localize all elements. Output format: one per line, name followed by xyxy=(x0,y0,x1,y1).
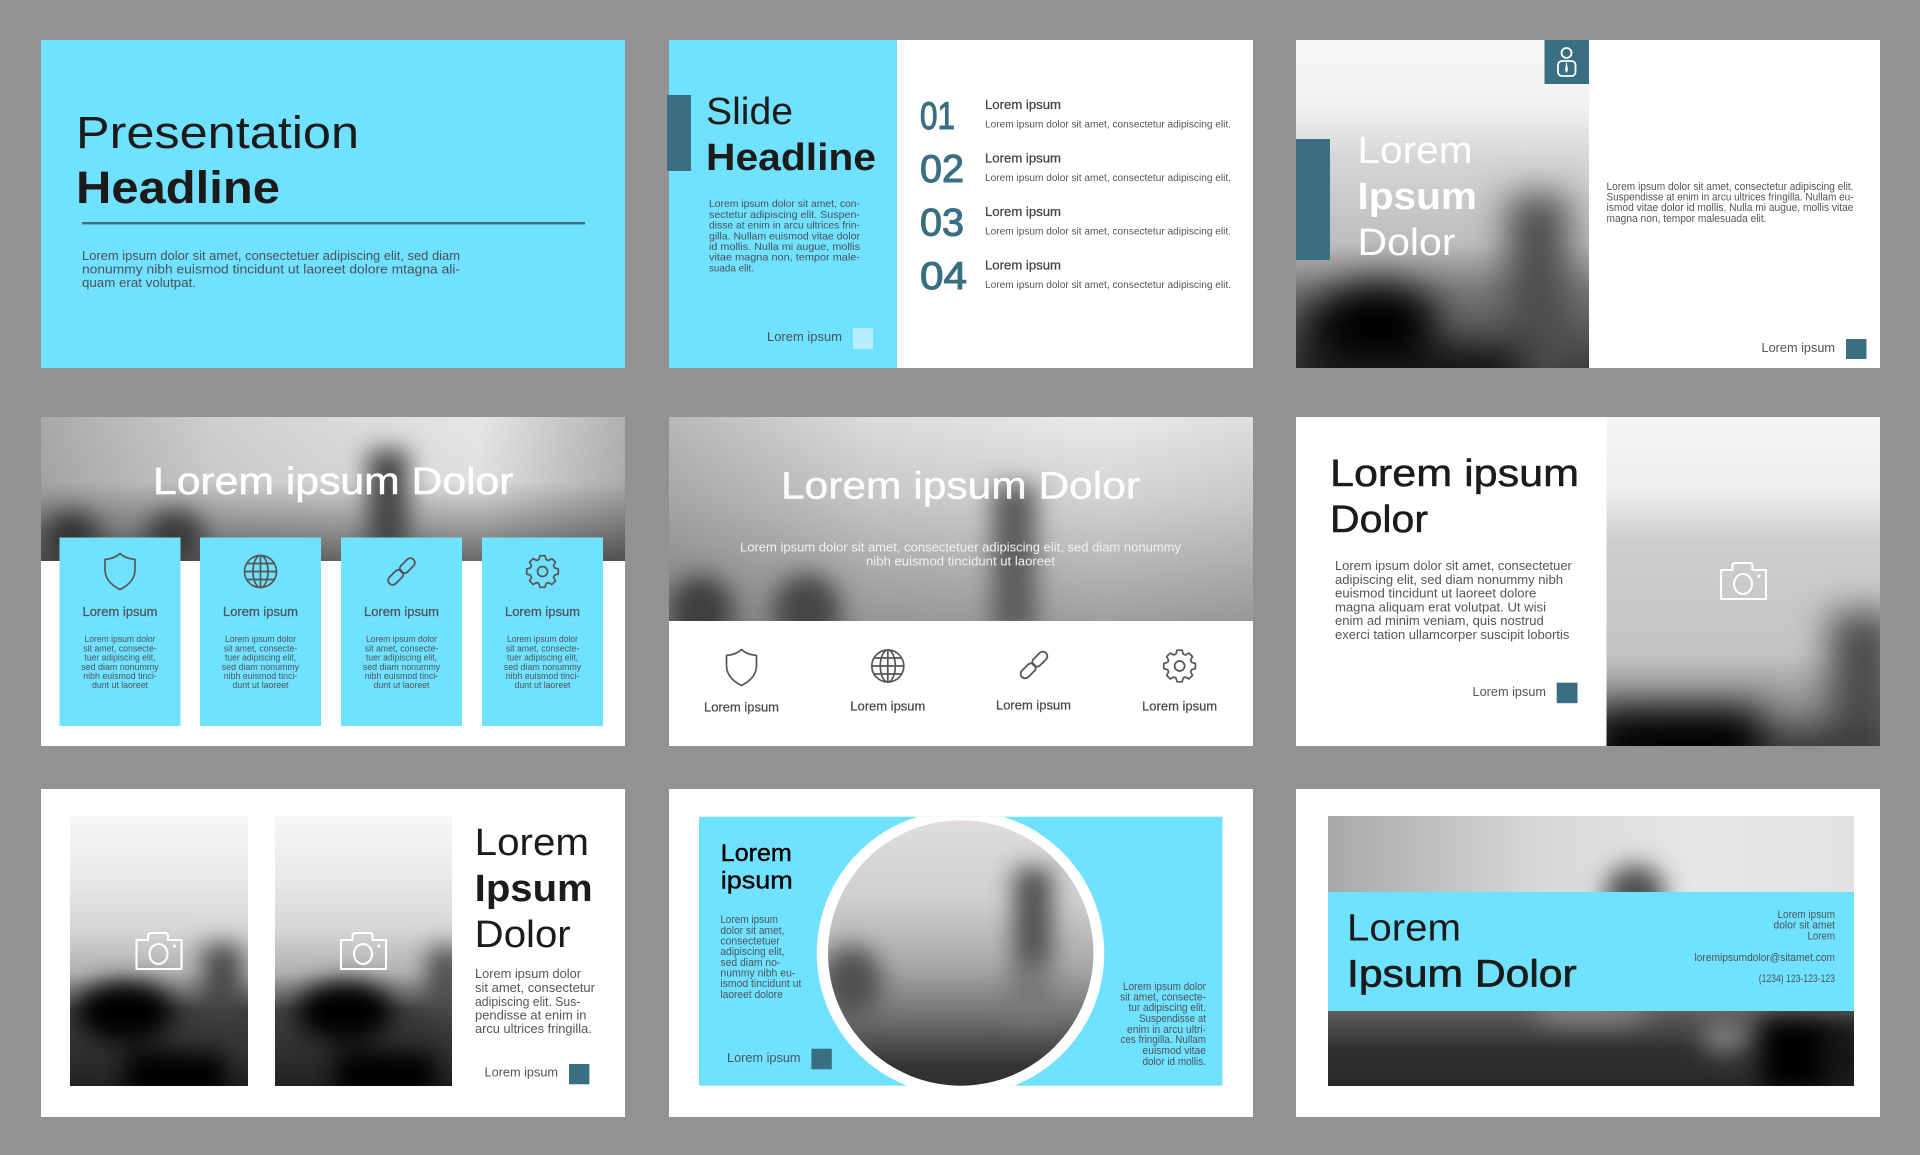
footer label: Lorem ipsum xyxy=(1762,341,1835,355)
list item 02: Lorem ipsum dolor sit amet, consectetur adipiscing elit. xyxy=(985,173,1231,184)
footer label xyxy=(727,1049,832,1069)
blurred photo right xyxy=(275,816,452,1086)
footer label: Lorem ipsum xyxy=(484,1066,558,1080)
card 4: Lorem ipsum dolor xyxy=(507,634,578,644)
heading: ipsum xyxy=(721,867,793,894)
footer label xyxy=(484,1064,589,1084)
footer label xyxy=(1472,683,1578,703)
text block: right: tur adipiscing elit. xyxy=(1128,1002,1206,1014)
list item 01 xyxy=(920,95,1231,138)
text block: description: id mollis. Nulla mi augue, mollis xyxy=(709,242,860,253)
icon item: gear xyxy=(1142,650,1217,714)
blurred photo xyxy=(1606,417,1880,746)
text block: subheading: nibh euismod tincidunt ut laoreet xyxy=(866,554,1055,568)
card 4: nibh euismod tinci- xyxy=(506,671,579,681)
icon: camera left xyxy=(136,933,182,969)
contact details: Lorem ipsum xyxy=(1778,909,1835,921)
list item 02: Lorem ipsum xyxy=(985,152,1061,166)
text block: left xyxy=(720,914,801,1001)
panel: text and photo slide xyxy=(1296,417,1880,746)
footer label xyxy=(767,328,873,349)
text block: description: Lorem ipsum dolor sit amet, consectetur adipiscing elit. xyxy=(1606,181,1854,193)
icon: link xyxy=(386,556,417,587)
heading: Lorem Ipsum Dolor: Lorem xyxy=(1358,130,1472,172)
text block: right: ces fringilla. Nullam xyxy=(1120,1034,1206,1046)
text block: intro xyxy=(82,249,460,290)
panel: icon row slide xyxy=(669,417,1253,746)
text block: left: nummy nibh eu- xyxy=(720,968,796,980)
heading: Lorem xyxy=(721,840,792,867)
heading: Lorem ipsum Dolor xyxy=(153,461,514,503)
text block: description: adipiscing elit, sed diam nonummy nibh xyxy=(1335,572,1563,587)
card 3: tuer adipiscing elit, xyxy=(366,652,437,662)
text block: right: euismod vitae xyxy=(1142,1045,1206,1057)
heading: Ipsum xyxy=(475,868,593,910)
list item 01: 01 xyxy=(920,95,955,138)
card 3: Lorem ipsum xyxy=(364,604,439,619)
icon: person badge xyxy=(1544,40,1589,84)
heading: Presentation Headline: Headline xyxy=(76,162,280,213)
footer label: Lorem ipsum xyxy=(727,1051,800,1065)
blurred photo xyxy=(1296,40,1589,400)
blurred photo left xyxy=(70,816,248,1086)
list item 03: Lorem ipsum dolor sit amet, consectetur adipiscing elit. xyxy=(985,226,1231,238)
text block: description: magna aliquam erat volutpat. Ut wisi xyxy=(1335,600,1546,614)
footer label: Lorem ipsum xyxy=(767,330,842,344)
card 2 xyxy=(200,538,321,726)
list item 04 xyxy=(920,255,1231,298)
heading: Lorem Ipsum Dolor xyxy=(1358,130,1477,264)
heading: Ipsum Dolor xyxy=(1347,954,1577,996)
heading xyxy=(1347,908,1577,996)
text block: description: Lorem ipsum dolor xyxy=(475,966,582,981)
icon item: shield: Lorem ipsum xyxy=(704,700,779,715)
text block: left: dolor sit amet, xyxy=(720,925,784,937)
icon: gear xyxy=(527,556,558,587)
text block: subheading xyxy=(740,540,1181,568)
list item 04: 04 xyxy=(920,255,967,298)
text block: description: sit amet, consectetur xyxy=(475,980,596,995)
text block: description xyxy=(1335,558,1572,642)
accent bar xyxy=(1296,139,1330,260)
card 1: nibh euismod tinci- xyxy=(83,671,157,681)
card 3: dunt ut laoreet xyxy=(374,680,430,690)
card 2: sed diam nonummy xyxy=(222,662,300,672)
contact details: loremipsumdolor@sitamet.com xyxy=(1694,952,1835,964)
text block: description: ismod vitae dolor id mollis. Nulla mi augue, mollis vitae xyxy=(1606,202,1854,214)
heading xyxy=(1330,453,1579,541)
text block: description: vitae magna non, tempor male- xyxy=(709,252,860,264)
heading: Dolor xyxy=(475,914,571,956)
card 3: sed diam nonummy xyxy=(363,662,441,672)
card 1: sed diam nonummy xyxy=(81,662,159,672)
list item 03: 03 xyxy=(920,202,964,244)
icon item: gear: Lorem ipsum xyxy=(1142,699,1217,714)
text block: description: exerci tation ullamcorper suscipit lobortis xyxy=(1335,627,1570,642)
cyan band xyxy=(1328,892,1854,1011)
heading: Lorem Ipsum Dolor: Dolor xyxy=(1358,222,1456,264)
card 4: Lorem ipsum xyxy=(505,604,580,619)
list item 04: Lorem ipsum xyxy=(985,258,1061,272)
text block: right: sit amet, consecte- xyxy=(1120,992,1206,1004)
list item 04: Lorem ipsum dolor sit amet, consectetur adipiscing elit. xyxy=(985,280,1231,291)
text block: description: suada elit. xyxy=(709,264,754,274)
heading: Presentation Headline: Presentation xyxy=(76,107,359,158)
text block: right: enim in arcu ultri- xyxy=(1127,1024,1206,1036)
list item 02: 02 xyxy=(920,148,964,191)
list item 03 xyxy=(920,202,1231,244)
text block: description: sectetur adipiscing elit. Suspen- xyxy=(709,210,860,221)
card 4: dunt ut laoreet xyxy=(514,680,571,690)
contact details: Lorem xyxy=(1808,930,1835,942)
icon item: globe: Lorem ipsum xyxy=(850,699,925,714)
text block: description xyxy=(475,966,596,1036)
text block: subheading: Lorem ipsum dolor sit amet, consectetuer adipiscing elit, sed diam nonummy xyxy=(740,540,1181,554)
panel: circle photo slide xyxy=(669,789,1253,1117)
card 1: Lorem ipsum xyxy=(82,604,158,619)
text block: description: euismod tincidunt ut laoreet dolore xyxy=(1335,586,1536,601)
panel: four cards slide xyxy=(41,417,625,746)
card 3: sit amet, consecte- xyxy=(365,644,438,654)
text block: description: pendisse at enim in xyxy=(475,1008,586,1023)
card 1: tuer adipiscing elit, xyxy=(84,652,156,662)
heading: Dolor xyxy=(1330,499,1428,541)
card 4: tuer adipiscing elit, xyxy=(507,652,578,662)
panel: two photos slide xyxy=(41,789,625,1117)
text block: description: enim ad minim veniam, quis nostrud xyxy=(1335,613,1544,628)
text block: description: Suspendisse at enim in arcu ultrices fringilla. Nullam eu- xyxy=(1606,192,1854,204)
accent bar xyxy=(667,95,691,171)
blurred photo banner xyxy=(669,417,1253,621)
icon item: link: Lorem ipsum xyxy=(996,698,1071,713)
text block: left: sed diam no- xyxy=(720,957,781,969)
panel: presentation headline slide xyxy=(41,40,625,368)
text block: description xyxy=(709,199,861,274)
list item 01: Lorem ipsum xyxy=(985,98,1061,112)
contact details: dolor sit amet xyxy=(1774,920,1835,932)
text block: description: Lorem ipsum dolor sit amet, con- xyxy=(709,199,860,210)
text block: right: dolor id mollis. xyxy=(1142,1056,1206,1068)
card 1: sit amet, consecte- xyxy=(83,644,157,654)
text block: intro: nonummy nibh euismod tincidunt ut laoreet dolore mtagna ali- xyxy=(82,262,460,276)
text block: right: Suspendisse at xyxy=(1139,1013,1206,1025)
list item 01: Lorem ipsum dolor sit amet, consectetur adipiscing elit. xyxy=(985,120,1231,130)
card 1: Lorem ipsum dolor xyxy=(84,634,156,644)
text block: description: adipiscing elit. Sus- xyxy=(475,994,580,1009)
text block: description: arcu ultrices fringilla. xyxy=(475,1021,592,1036)
heading: Lorem ipsum xyxy=(1330,453,1579,495)
heading: Slide Headline: Slide xyxy=(706,91,793,133)
heading: Lorem Ipsum Dolor: Ipsum xyxy=(1358,176,1477,218)
heading: Lorem ipsum Dolor xyxy=(781,466,1140,508)
icon: globe xyxy=(244,556,276,588)
text block: description: gilla. Nullam euismod vitae dolor xyxy=(709,232,861,242)
card 2: sit amet, consecte- xyxy=(224,644,297,654)
card 3 xyxy=(341,538,462,726)
panel: contact band slide xyxy=(1296,789,1880,1117)
white circle frame xyxy=(817,817,1104,1086)
card 1: dunt ut laoreet xyxy=(92,680,148,690)
icon item: link xyxy=(996,650,1071,713)
text block: description: Lorem ipsum dolor sit amet, consectetuer xyxy=(1335,558,1572,573)
heading: Lorem xyxy=(1347,908,1461,950)
card 2: Lorem ipsum dolor xyxy=(225,634,296,644)
icon item: shield xyxy=(704,650,779,715)
heading: Slide Headline xyxy=(706,91,876,179)
heading: Slide Headline: Headline xyxy=(706,137,876,179)
heading: Presentation Headline xyxy=(76,107,359,213)
contact details: (1234) 123-123-123 xyxy=(1759,973,1835,985)
card 4: sit amet, consecte- xyxy=(506,644,579,654)
card 2: nibh euismod tinci- xyxy=(224,671,297,681)
blurred photo banner xyxy=(41,417,625,575)
card 2: Lorem ipsum xyxy=(223,604,298,619)
heading xyxy=(721,840,793,894)
card 2: tuer adipiscing elit, xyxy=(225,652,296,662)
icon item: globe xyxy=(850,650,925,714)
card 2: dunt ut laoreet xyxy=(232,680,289,690)
text block: description xyxy=(1606,181,1854,225)
text block: description: magna non, tempor malesuada elit. xyxy=(1606,213,1766,225)
text block: left: Lorem ipsum xyxy=(720,914,778,926)
text block: left: ismod tincidunt ut xyxy=(720,978,801,990)
blurred photo xyxy=(1328,816,1866,1092)
card 1 xyxy=(60,538,180,726)
card 3: nibh euismod tinci- xyxy=(365,671,438,681)
footer label xyxy=(1762,339,1866,359)
card 3: Lorem ipsum dolor xyxy=(366,634,437,644)
text block: left: adipiscing elit, xyxy=(720,946,784,958)
contact details xyxy=(1694,909,1835,985)
text block: left: laoreet dolore xyxy=(720,989,783,1001)
card 4 xyxy=(482,538,603,726)
card 4: sed diam nonummy xyxy=(504,662,582,672)
text block: right: Lorem ipsum dolor xyxy=(1123,981,1206,993)
icon: camera right xyxy=(341,933,386,969)
text block: right xyxy=(1120,981,1206,1068)
text block: intro: Lorem ipsum dolor sit amet, consectetuer adipiscing elit, sed diam xyxy=(82,249,460,263)
text block: left: consectetuer xyxy=(720,936,780,948)
list item 03: Lorem ipsum xyxy=(985,205,1061,219)
icon: shield xyxy=(105,554,135,590)
footer label: Lorem ipsum xyxy=(1472,685,1546,699)
text block: description: disse at enim in arcu ultrices frin- xyxy=(709,220,860,232)
icon: camera xyxy=(1721,563,1766,599)
heading: Lorem xyxy=(475,822,589,864)
blurred circular photo xyxy=(822,820,1094,1086)
heading xyxy=(475,822,593,956)
list item 02 xyxy=(920,148,1231,191)
text block: intro: quam erat volutpat. xyxy=(82,276,196,290)
panel: photo with text slide xyxy=(1296,40,1880,400)
panel: numbered list slide xyxy=(667,40,1253,368)
